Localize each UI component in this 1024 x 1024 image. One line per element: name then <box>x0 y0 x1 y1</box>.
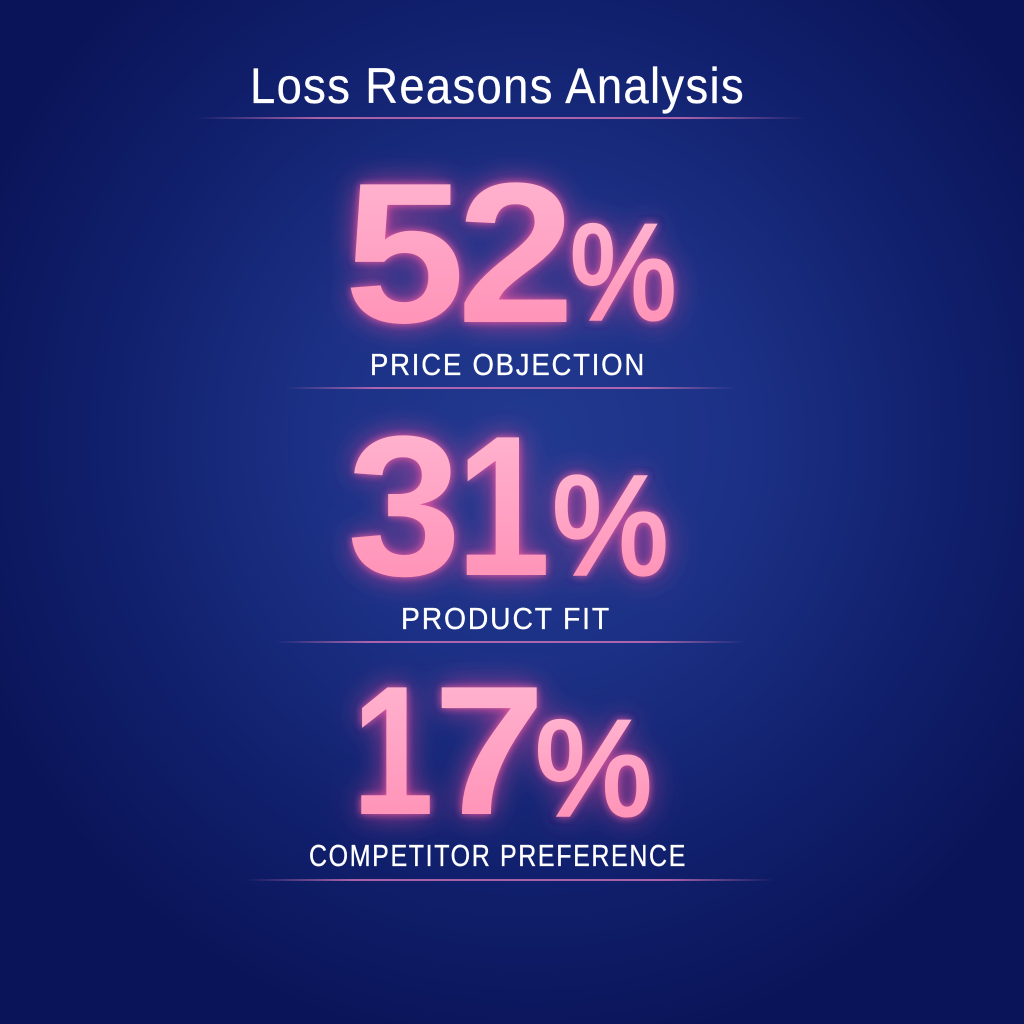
stat: 17% <box>352 648 652 854</box>
stat: 52%: 5 <box>344 142 465 365</box>
stat: 17%: 7 <box>433 648 546 853</box>
stat: 31%: 3 <box>347 395 462 618</box>
stat: 31%: % <box>552 447 669 604</box>
stat: 17%: % <box>535 693 652 844</box>
stat: 17%: 1 <box>352 648 434 854</box>
label: price objection: PRICE OBJECTION <box>370 347 646 382</box>
stat: 31% <box>347 395 669 618</box>
title underline <box>195 117 805 119</box>
label: competitor preference: COMPETITOR PREFERENCE <box>309 838 687 873</box>
stat: 52%: 2 <box>457 141 575 365</box>
label: product fit: PRODUCT FIT <box>401 601 611 636</box>
stat: 31%: 1 <box>456 395 551 618</box>
divider one <box>285 387 735 389</box>
stat: 52%: % <box>570 197 676 349</box>
title: Loss Reasons Analysis <box>250 58 745 114</box>
divider three <box>245 879 775 881</box>
divider two <box>275 641 745 643</box>
stat: 52% <box>344 141 676 365</box>
